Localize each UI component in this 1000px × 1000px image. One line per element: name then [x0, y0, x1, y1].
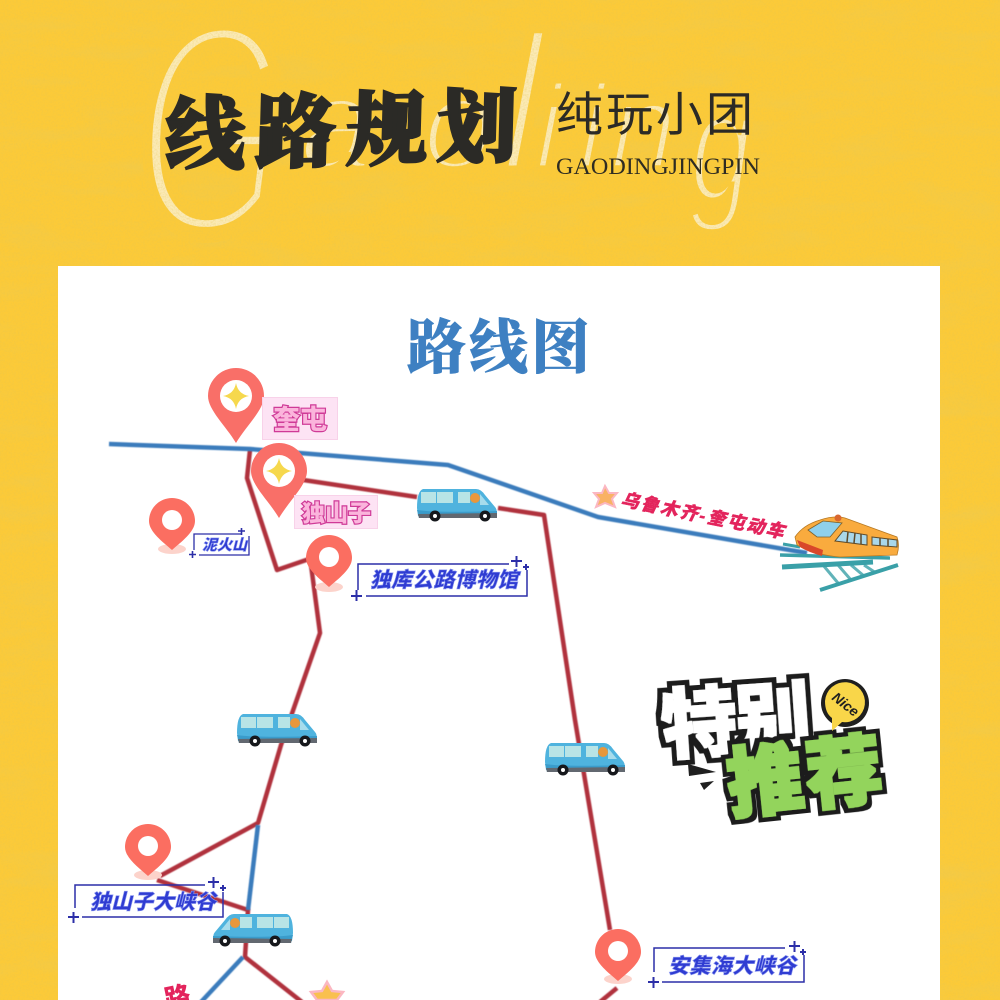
- icon: bus 2: [237, 714, 317, 746]
- icon: bus 3: [545, 743, 625, 776]
- watermark script lettering: ii: [535, 60, 608, 194]
- label: 独山子: 独山子: [302, 500, 371, 526]
- icon: bus 4: [213, 914, 293, 946]
- label: 奎屯: [262, 398, 338, 440]
- icon: star at bottom edge: [311, 982, 343, 1000]
- label: 奎屯: 奎屯: [273, 405, 327, 435]
- label: 独山子: [294, 496, 378, 528]
- icon: star: [594, 486, 617, 507]
- icon: pin 独山子大峡谷: [125, 824, 171, 880]
- icon: pin 安集海大峡谷: [595, 929, 641, 984]
- icon: pin 泥火山: [149, 498, 195, 554]
- watermark script lettering: n: [610, 60, 677, 194]
- route: red road lines: [157, 450, 617, 1000]
- label: 独山子大峡谷: 独山子大峡谷: [90, 891, 219, 914]
- watermark script lettering: ao: [300, 50, 495, 196]
- icon: bus 1: [417, 489, 497, 522]
- label: 泥火山: [189, 528, 249, 558]
- icon: train on rails: [780, 514, 898, 590]
- label: 独库公路博物馆: [351, 556, 529, 601]
- route: blue rail line: [109, 444, 807, 1000]
- label: 独库公路博物馆: 独库公路博物馆: [370, 568, 522, 592]
- title: 线路规划: 线路规划: [164, 62, 519, 187]
- label: 独山子大峡谷: [68, 877, 226, 923]
- watermark script lettering: g: [690, 59, 753, 233]
- icon: pin 奎屯: [208, 368, 264, 443]
- subtitle latin: GAODINGJINGPIN: GAODINGJINGPIN: [556, 154, 760, 179]
- heading: 路线图: 路线图: [407, 315, 590, 381]
- watermark script lettering: l: [500, 0, 548, 212]
- label: 安集海大峡谷: [648, 941, 806, 988]
- sticker: 特别推荐: [658, 675, 886, 829]
- label: 安集海大峡谷: 安集海大峡谷: [668, 954, 799, 978]
- icon: Nice speech bubble: [821, 679, 869, 731]
- icon: pin 独库公路博物馆: [306, 535, 352, 592]
- label: 乌鲁木齐-奎屯动车: 乌鲁木齐-奎屯动车: [619, 489, 789, 543]
- panel: route map card: [58, 266, 940, 1000]
- sticker text: 推荐: 推荐: [723, 728, 886, 829]
- sticker text: 特别: 特别: [658, 675, 814, 770]
- label: 泥火山: 泥火山: [202, 537, 249, 554]
- icon: Nice speech bubble: Nice: [829, 689, 862, 720]
- watermark script lettering: [138, 0, 753, 296]
- icon: pin 独山子: [251, 443, 307, 518]
- icon: burst marks: [688, 764, 716, 790]
- subtitle: 纯玩小团: 纯玩小团: [556, 88, 753, 141]
